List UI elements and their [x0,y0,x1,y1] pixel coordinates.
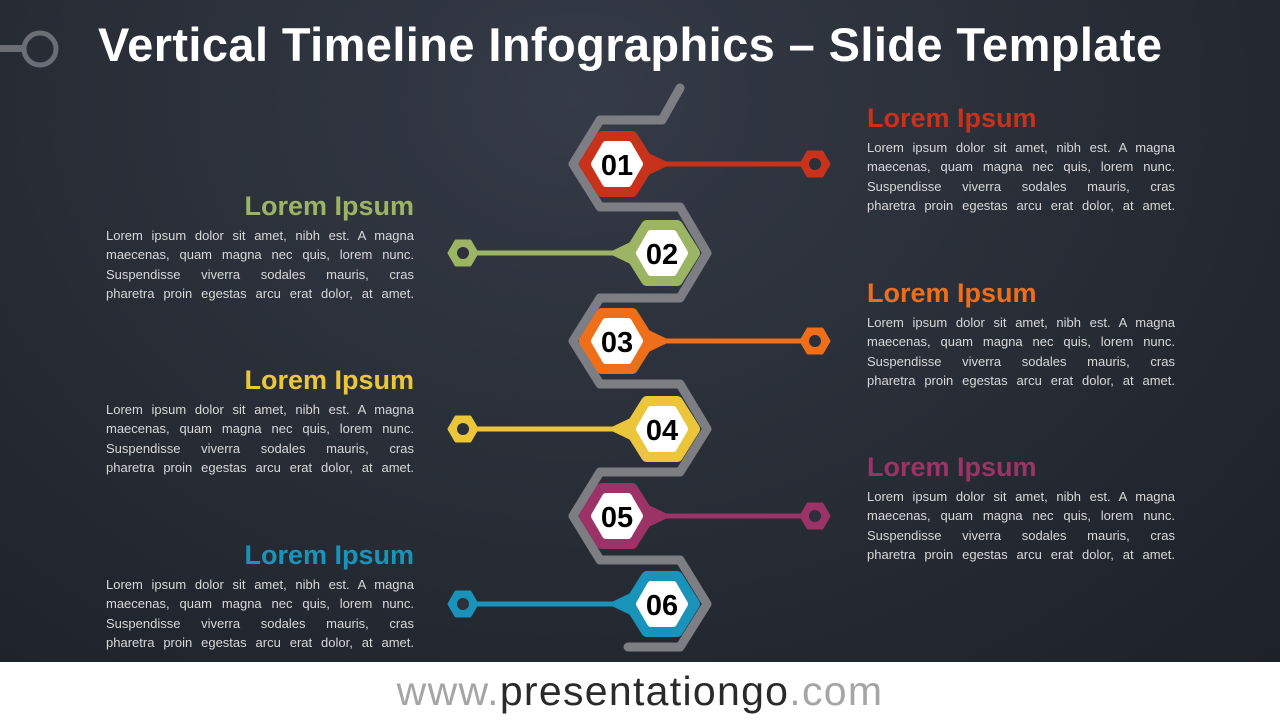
gray snake path [573,88,707,647]
step 03 [585,314,829,368]
step 06: 06 [646,590,678,622]
text: step 04 [106,365,414,475]
text: step 02: maecenas, quam magna nec quis, lorem nunc. [106,247,414,262]
text: step 05: pharetra proin egestas arcu erat dolor, at amet. [867,547,1175,562]
text: step 04: maecenas, quam magna nec quis, lorem nunc. [106,421,414,436]
footer [0,662,1280,720]
text: step 01: pharetra proin egestas arcu erat dolor, at amet. [867,198,1175,213]
text: step 06 [106,540,414,650]
text: step 02: pharetra proin egestas arcu erat dolor, at amet. [106,286,414,301]
text: step 06: Suspendisse viverra sodales mauris, cras [106,616,414,631]
text: step 01: maecenas, quam magna nec quis, lorem nunc. [867,159,1175,174]
text: step 01: Lorem Ipsum [867,103,1037,133]
step 01 [585,137,829,191]
step 04 [449,402,694,456]
step 06 [449,577,694,631]
text: step 02 [106,191,414,301]
text: step 01: Lorem ipsum dolor sit amet, nibh est. A magna [867,140,1175,155]
title: Vertical Timeline Infographics – Slide Template [98,18,1162,71]
text: step 01 [867,103,1175,213]
text: step 03 [867,278,1175,388]
text: step 05 [867,452,1175,562]
text: step 04: Lorem Ipsum [244,365,414,395]
text: step 05: Lorem ipsum dolor sit amet, nibh est. A magna [867,489,1175,504]
text: step 04: Suspendisse viverra sodales mauris, cras [106,441,414,456]
text: step 05: maecenas, quam magna nec quis, lorem nunc. [867,508,1175,523]
text: step 03: Lorem Ipsum [867,278,1037,308]
text: step 06: Lorem Ipsum [244,540,414,570]
text: step 03: pharetra proin egestas arcu erat dolor, at amet. [867,373,1175,388]
step 05 [585,489,829,543]
step 04: 04 [646,415,678,447]
text: step 06: maecenas, quam magna nec quis, lorem nunc. [106,596,414,611]
footer: www.presentationgo.com [397,668,883,714]
step 05: 05 [601,502,633,534]
text: step 04: pharetra proin egestas arcu erat dolor, at amet. [106,460,414,475]
text: step 03: maecenas, quam magna nec quis, lorem nunc. [867,334,1175,349]
text: step 02: Suspendisse viverra sodales mauris, cras [106,267,414,282]
text: step 06: Lorem ipsum dolor sit amet, nibh est. A magna [106,577,414,592]
text: step 05: Lorem Ipsum [867,452,1037,482]
step 03: 03 [601,327,633,359]
text: step 05: Suspendisse viverra sodales mauris, cras [867,528,1175,543]
text: step 03: Lorem ipsum dolor sit amet, nibh est. A magna [867,315,1175,330]
text: step 02: Lorem ipsum dolor sit amet, nibh est. A magna [106,228,414,243]
text: step 03: Suspendisse viverra sodales mauris, cras [867,354,1175,369]
text: step 01: Suspendisse viverra sodales mauris, cras [867,179,1175,194]
step 02 [449,226,694,280]
text: step 06: pharetra proin egestas arcu erat dolor, at amet. [106,635,414,650]
text: step 02: Lorem Ipsum [244,191,414,221]
step 01: 01 [601,150,633,182]
logo icon [0,30,58,68]
step 02: 02 [646,239,678,271]
text: step 04: Lorem ipsum dolor sit amet, nibh est. A magna [106,402,414,417]
